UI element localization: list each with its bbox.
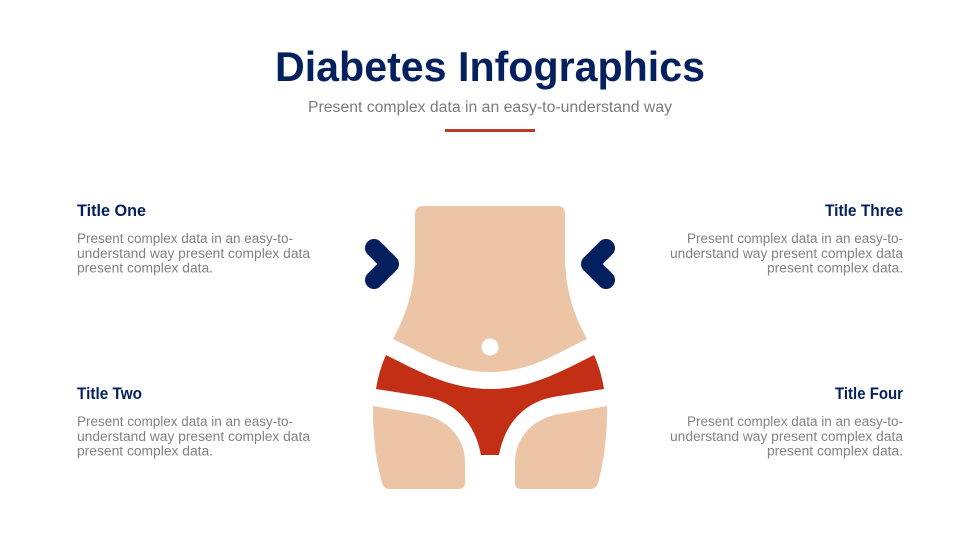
text block: title one: present complex data. — [77, 260, 213, 276]
text block: title one: Title One — [77, 202, 146, 220]
text block: title two: Title Two — [77, 385, 142, 403]
navel — [482, 338, 498, 356]
text block: title four: present complex data. — [767, 444, 903, 458]
text block: title one — [77, 202, 311, 276]
subtitle: Present complex data in an easy-to-understand way — [308, 99, 672, 116]
icon: right chevron arrow — [590, 248, 606, 280]
torso — [393, 206, 587, 372]
text block: title four: understand way present complex data — [670, 429, 904, 444]
text block: title one: Present complex data in an easy-to- — [77, 231, 293, 246]
text block: title three: understand way present complex data — [670, 246, 904, 261]
text block: title four: Present complex data in an easy-to- — [687, 414, 903, 429]
header — [275, 43, 705, 132]
text block: title three — [670, 202, 904, 276]
title: Diabetes Infographics — [275, 43, 705, 90]
text block: title three: Title Three — [825, 202, 903, 220]
body illustration — [373, 206, 607, 489]
text block: title two: present complex data. — [77, 444, 213, 458]
text block: title three: present complex data. — [767, 260, 903, 276]
underwear — [376, 355, 604, 455]
right leg — [515, 406, 607, 489]
text block: title one: understand way present complex data — [77, 246, 311, 261]
text block: title two: understand way present complex data — [77, 429, 311, 444]
text block: title two: Present complex data in an easy-to- — [77, 414, 293, 429]
text block: title four: Title Four — [835, 385, 904, 403]
icon: left chevron arrow — [374, 248, 390, 280]
text block: title two — [77, 385, 311, 458]
title underline — [445, 129, 535, 132]
text block: title four — [670, 385, 904, 458]
left leg — [373, 406, 465, 489]
text block: title three: Present complex data in an easy-to- — [687, 231, 903, 246]
